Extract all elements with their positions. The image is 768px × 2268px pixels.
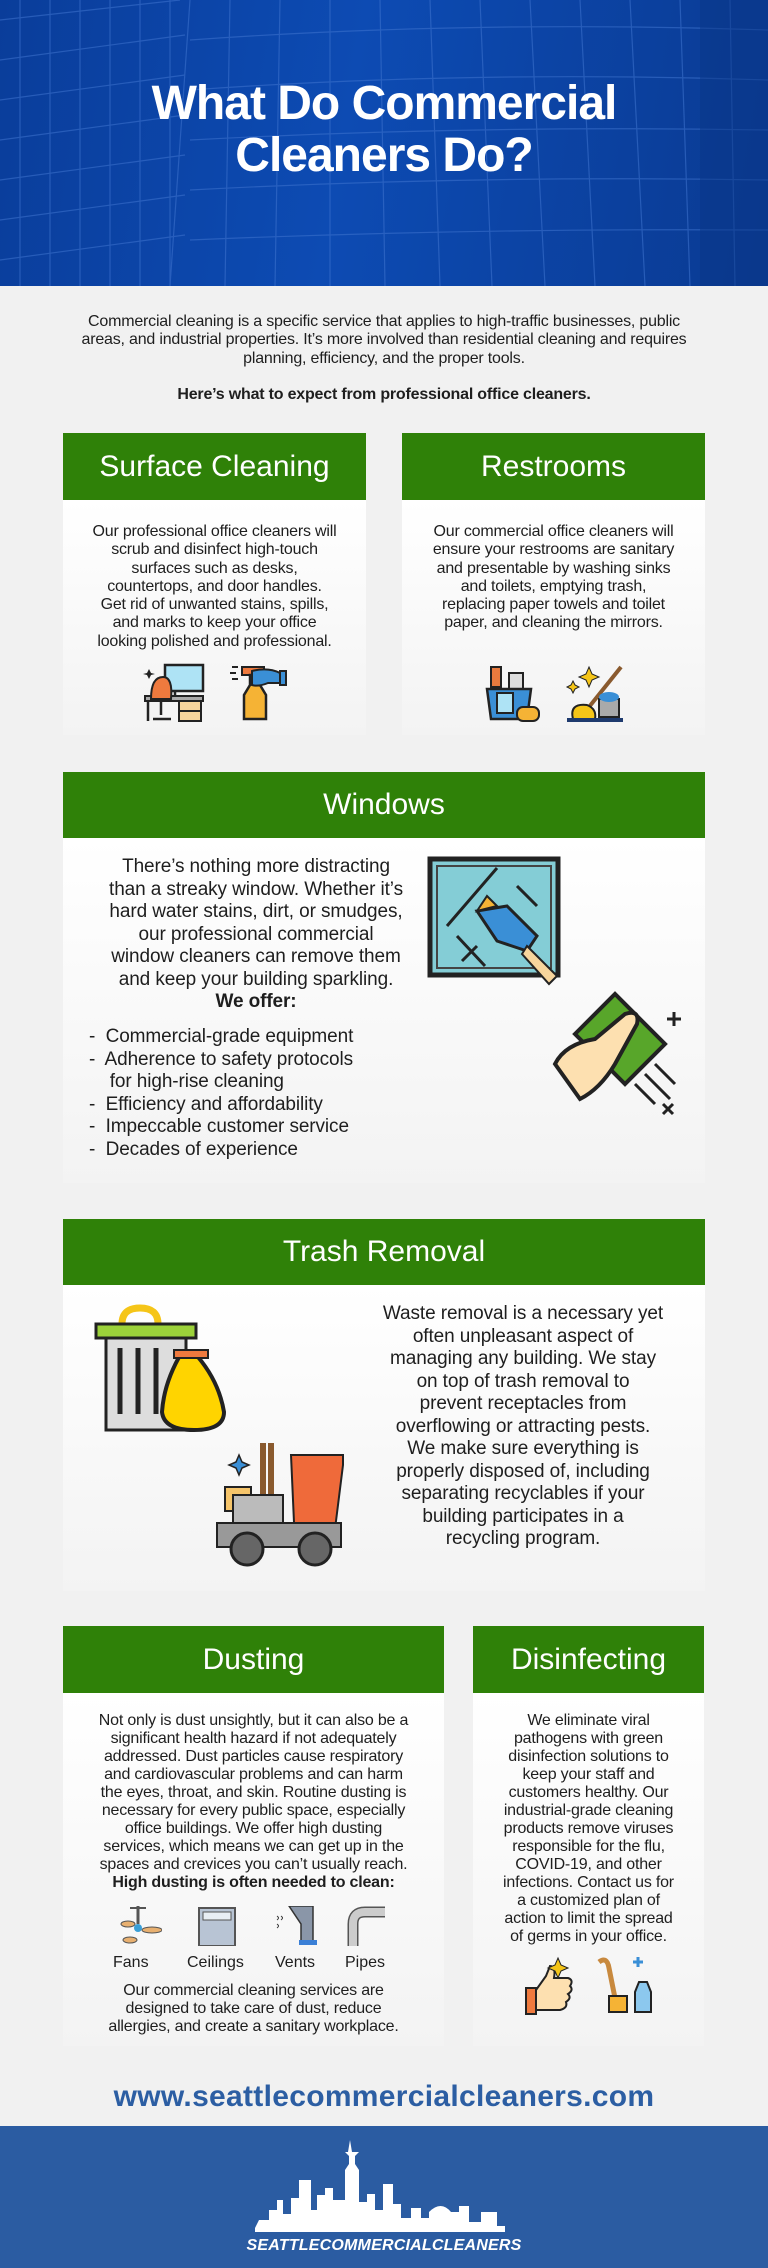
footer (0, 2126, 768, 2268)
text: restrooms: paper, and cleaning the mirrors. (444, 614, 663, 631)
text: dusting closing: Our commercial cleaning services are (123, 1982, 384, 1999)
icon: vacuum and spray (598, 1957, 652, 2013)
text: trash removal: Waste removal is a necessary yet (383, 1303, 663, 1324)
panel: restrooms (402, 433, 705, 722)
text: disinfecting: action to limit the spread (504, 1910, 673, 1927)
text: dusting: addressed. Dust particles cause respiratory (104, 1748, 403, 1765)
text: dusting: spaces and crevices you can’t usually reach. (100, 1856, 407, 1873)
intro bold line: Here’s what to expect from professional office cleaners. (177, 386, 591, 403)
icon: cleaning bucket (486, 666, 540, 722)
labels: Vents (275, 1954, 315, 1971)
text: restrooms: replacing paper towels and toilet (442, 596, 665, 613)
text: dusting: office buildings. We offer high dusting (125, 1820, 382, 1837)
text: disinfecting: infections. Contact us for (503, 1874, 674, 1891)
text: dusting: significant health hazard if not adequately (111, 1730, 396, 1747)
text: disinfecting: products remove viruses (504, 1820, 673, 1837)
panel: surface cleaning (63, 433, 366, 722)
labels (113, 1954, 385, 1971)
text: disinfecting: COVID-19, and other (515, 1856, 662, 1873)
hero banner (0, 0, 768, 286)
text: disinfecting: a customized plan of (517, 1892, 660, 1909)
heading: disinfecting (473, 1626, 704, 1693)
text: surface cleaning: scrub and disinfect high-touch (111, 541, 318, 558)
panel: disinfecting (473, 1626, 704, 2015)
text: restrooms (433, 523, 674, 631)
icon: cleaning cart (216, 1443, 344, 1566)
icon: fan (120, 1906, 162, 1944)
text: windows intro: than a streaky window. Whether it’s (109, 878, 403, 900)
text: disinfecting (503, 1712, 674, 1945)
text: windows intro: hard water stains, dirt, or smudges, (109, 901, 403, 922)
heading: restrooms: Restrooms (481, 450, 626, 483)
heading: surface cleaning: Surface Cleaning (99, 450, 330, 483)
labels: Ceilings (187, 1954, 244, 1971)
text: trash removal: properly disposed of, including (396, 1460, 650, 1482)
heading: trash removal (63, 1219, 705, 1285)
title: Cleaners Do? (235, 129, 533, 182)
text: surface cleaning (92, 523, 336, 650)
text: disinfecting: keep your staff and (522, 1766, 654, 1783)
heading: surface cleaning (63, 433, 366, 500)
icon: mop (566, 666, 623, 722)
heading: dusting: Dusting (203, 1643, 304, 1676)
text: trash removal: We make sure everything is (407, 1438, 639, 1459)
text: trash removal: building participates in a (422, 1506, 624, 1526)
list: we offer: - Decades of experience (89, 1138, 298, 1160)
heading: restrooms (402, 433, 705, 500)
intro text: areas, and industrial properties. It’s more involved than residential cleaning and requires (82, 331, 686, 348)
text: windows intro: We offer: (215, 991, 297, 1012)
text: windows intro: There’s nothing more distracting (122, 856, 390, 877)
text: disinfecting: responsible for the flu, (512, 1838, 665, 1855)
text: surface cleaning: countertops, and door handles. (107, 578, 322, 595)
text: trash removal: overflowing or attracting pests. (396, 1416, 650, 1436)
icon: thumbs up (525, 1956, 573, 2015)
icon: pipe (348, 1906, 385, 1946)
list: we offer: for high-rise cleaning (110, 1071, 284, 1092)
text: restrooms: ensure your restrooms are sanitary (433, 541, 674, 558)
text: windows intro: and keep your building sparkling. (119, 968, 393, 990)
icon: spray bottle (230, 666, 287, 720)
text: restrooms: Our commercial office cleaners will (434, 523, 673, 540)
text: surface cleaning: surfaces such as desks, (131, 560, 298, 577)
text: trash removal: managing any building. We stay (390, 1348, 656, 1369)
icon: window squeegee (428, 856, 560, 986)
text: surface cleaning: Our professional office cleaners will (92, 523, 336, 540)
icon: ceiling (198, 1907, 236, 1946)
text: restrooms: and toilets, emptying trash, (461, 578, 646, 595)
text: disinfecting: of germs in your office. (510, 1928, 667, 1945)
icon: vent (276, 1906, 317, 1945)
text: surface cleaning: looking polished and professional. (97, 633, 332, 650)
list: we offer: - Adherence to safety protocols (89, 1048, 353, 1070)
title: What Do Commercial (152, 77, 616, 130)
list: we offer: - Impeccable customer service (89, 1116, 349, 1137)
labels: Pipes (345, 1954, 385, 1971)
text: dusting closing: allergies, and create a sanitary workplace. (108, 2018, 399, 2035)
text: dusting (99, 1712, 408, 1891)
icon: hand with cloth (552, 991, 681, 1115)
text: surface cleaning: and marks to keep your office (113, 614, 316, 631)
list: we offer: - Efficiency and affordability (89, 1094, 323, 1114)
text: windows intro: window cleaners can remove them (111, 946, 401, 967)
text: surface cleaning: Get rid of unwanted stains, spills, (101, 596, 328, 613)
icon: trash can with bag (94, 1304, 226, 1432)
text: disinfecting: disinfection solutions to (508, 1748, 669, 1765)
list: we offer: - Commercial-grade equipment (89, 1026, 353, 1047)
logo: wordmark: SEATTLECOMMERCIALCLEANERS (247, 2237, 521, 2254)
text: dusting: services, which means we can get up in the (103, 1838, 404, 1855)
text: trash removal: prevent receptacles from (420, 1393, 626, 1414)
text: dusting: the eyes, throat, and skin. Routine dusting is (101, 1784, 406, 1801)
website url: www.seattlecommercialcleaners.com (114, 2080, 654, 2113)
logo: skyline (255, 2140, 505, 2232)
text: trash removal (383, 1303, 663, 1549)
text: dusting: High dusting is often needed to clean: (112, 1874, 395, 1891)
text: restrooms: and presentable by washing sinks (437, 560, 670, 577)
text: dusting closing (108, 1982, 399, 2035)
text: disinfecting: industrial-grade cleaning (504, 1802, 673, 1819)
text: dusting closing: designed to take care of dust, reduce (126, 2000, 381, 2017)
text: windows intro (109, 856, 403, 1012)
icons: high dusting targets (113, 1906, 385, 1971)
icon: desk (143, 664, 204, 722)
text: disinfecting: We eliminate viral (527, 1712, 650, 1729)
heading: disinfecting: Disinfecting (511, 1643, 666, 1676)
heading: dusting (63, 1626, 444, 1693)
intro text (82, 313, 686, 367)
text: trash removal: often unpleasant aspect of (413, 1326, 633, 1346)
intro text: planning, efficiency, and the proper tools. (243, 350, 525, 367)
list: we offer (89, 1026, 354, 1160)
intro text: Commercial cleaning is a specific service that applies to high-traffic businesses, public (88, 313, 680, 330)
text: windows intro: our professional commercial (139, 924, 373, 944)
text: dusting: necessary for every public space, especially (102, 1802, 405, 1819)
title (152, 77, 616, 182)
text: dusting: and cardiovascular problems and can harm (104, 1766, 403, 1783)
heading: windows (63, 772, 705, 838)
heading: windows: Windows (323, 788, 445, 821)
panel: windows (63, 772, 705, 1160)
heading: trash removal: Trash Removal (283, 1235, 485, 1268)
panel: trash removal (63, 1219, 705, 1566)
labels: Fans (113, 1954, 149, 1971)
text: disinfecting: pathogens with green (514, 1730, 663, 1747)
panel: dusting (63, 1626, 444, 2035)
text: trash removal: recycling program. (446, 1528, 600, 1549)
text: trash removal: separating recyclables if your (401, 1483, 645, 1504)
text: disinfecting: customers healthy. Our (509, 1784, 668, 1801)
text: dusting: Not only is dust unsightly, but it can also be a (99, 1712, 408, 1729)
text: trash removal: on top of trash removal to (417, 1370, 629, 1392)
